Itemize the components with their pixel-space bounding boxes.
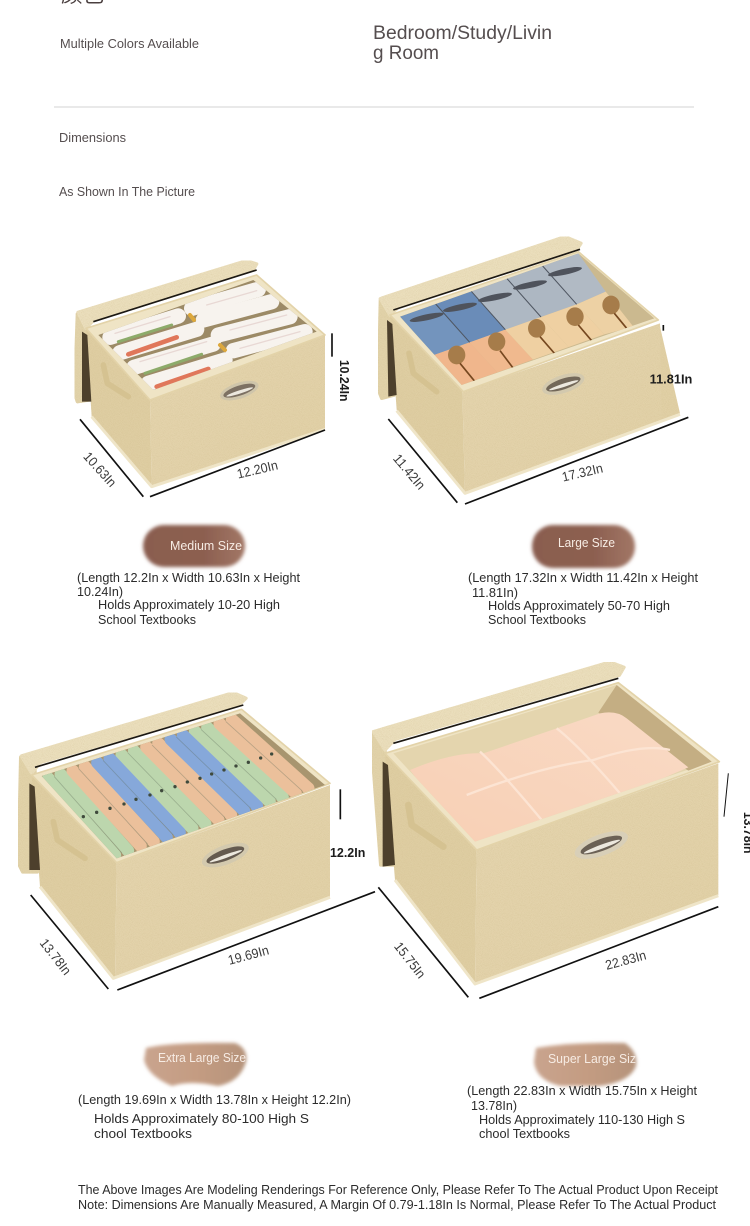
spec: super large: (Length 22.83In x Width 15.75In x Height [467,1083,697,1098]
pill: super large [534,1043,636,1086]
panel: medium box [75,261,352,497]
panel: large box [378,237,692,504]
dimension: 22.83In: 22.83In [604,948,648,973]
folded clothes [110,289,305,387]
spec: super large [467,1083,697,1141]
folded socks [400,253,633,385]
pill: medium [143,525,245,567]
front grommet [571,825,631,865]
spec: super large: 13.78In) [471,1098,517,1113]
label: large size: Large Size [558,536,615,550]
footer note: Note: Dimensions Are Manually Measured, A Margin Of 0.79-1.18In Is Normal, Please Refer To The Actual Product [78,1197,716,1212]
panel: extra large box [18,693,375,990]
spec: extra large: chool Textbooks [94,1126,193,1141]
spec: medium: (Length 12.2In x Width 10.63In x Height [77,570,300,585]
side handle [103,365,128,397]
spec: extra large: (Length 19.69In x Width 13.78In x Height 12.2In) [78,1092,351,1107]
dimension: 17.32In: 17.32In [560,460,604,484]
dimension: 12.20In: 12.20In [235,457,279,481]
spec: extra large: Holds Approximately 80-100 High S [94,1111,309,1126]
dimension: 11.42In: 11.42In [390,451,428,493]
spec: large: School Textbooks [488,612,586,627]
front grommet [199,837,252,873]
peach pillow [410,712,688,847]
spec: large: Holds Approximately 50-70 High [488,598,670,613]
label: super large size: Super Large Siz [548,1052,636,1066]
spec: medium: Holds Approximately 10-20 High [98,597,280,612]
spec: medium [77,570,300,627]
side handle [53,822,85,858]
front grommet [540,369,587,399]
spec: medium: 10.24In) [77,584,123,599]
side handle [408,805,443,847]
dimension lines [378,773,728,998]
panel: super large size label [467,1043,697,1141]
dimension lines [80,333,332,497]
dimension: 19.69In: 19.69In [226,943,270,968]
dimensions heading: Dimensions [59,131,126,145]
spec: large: 11.81In) [472,585,518,600]
footer note [78,1182,718,1212]
spec: medium: School Textbooks [98,612,196,627]
label: medium size: Medium Size [170,539,242,553]
room usage text: g Room [373,42,439,64]
side handle [409,353,437,392]
spec: large: (Length 17.32In x Width 11.42In x Height [468,570,698,585]
dimension: 10.63In: 10.63In [80,449,119,490]
spec: super large: chool Textbooks [479,1126,570,1141]
panel: medium size label [77,525,300,627]
label: extra large size: Extra Large Size [158,1051,246,1065]
spec: large [468,570,698,627]
dimension: 15.75In: 15.75In [391,939,429,981]
spec: super large: Holds Approximately 110-130 High S [479,1112,685,1127]
dimensions value: As Shown In The Picture [59,185,195,199]
dimension lines [31,789,375,990]
panel: super large box [372,662,750,998]
room usage text [373,22,552,64]
footer note: The Above Images Are Modeling Renderings For Reference Only, Please Refer To The Actual Product Upon Receipt [78,1182,718,1197]
panel: extra large size label [78,1043,351,1141]
dimension: 13.78In: 13.78In [37,936,74,978]
colors note: Multiple Colors Available [60,37,199,51]
dimension lines [388,325,688,504]
pill: extra large [144,1043,246,1086]
pill: large [532,525,635,568]
rolled shirts [48,720,308,855]
panel: large size label [468,525,698,627]
spec: extra large [78,1092,351,1141]
dimension: 11.81In: 11.81In [650,372,692,387]
room usage text: Bedroom/Study/Livin [373,22,552,44]
front grommet [218,377,261,404]
dimension: 12.2In: 12.2In [330,845,365,860]
dimension: 10.24In: 10.24In [337,360,352,401]
